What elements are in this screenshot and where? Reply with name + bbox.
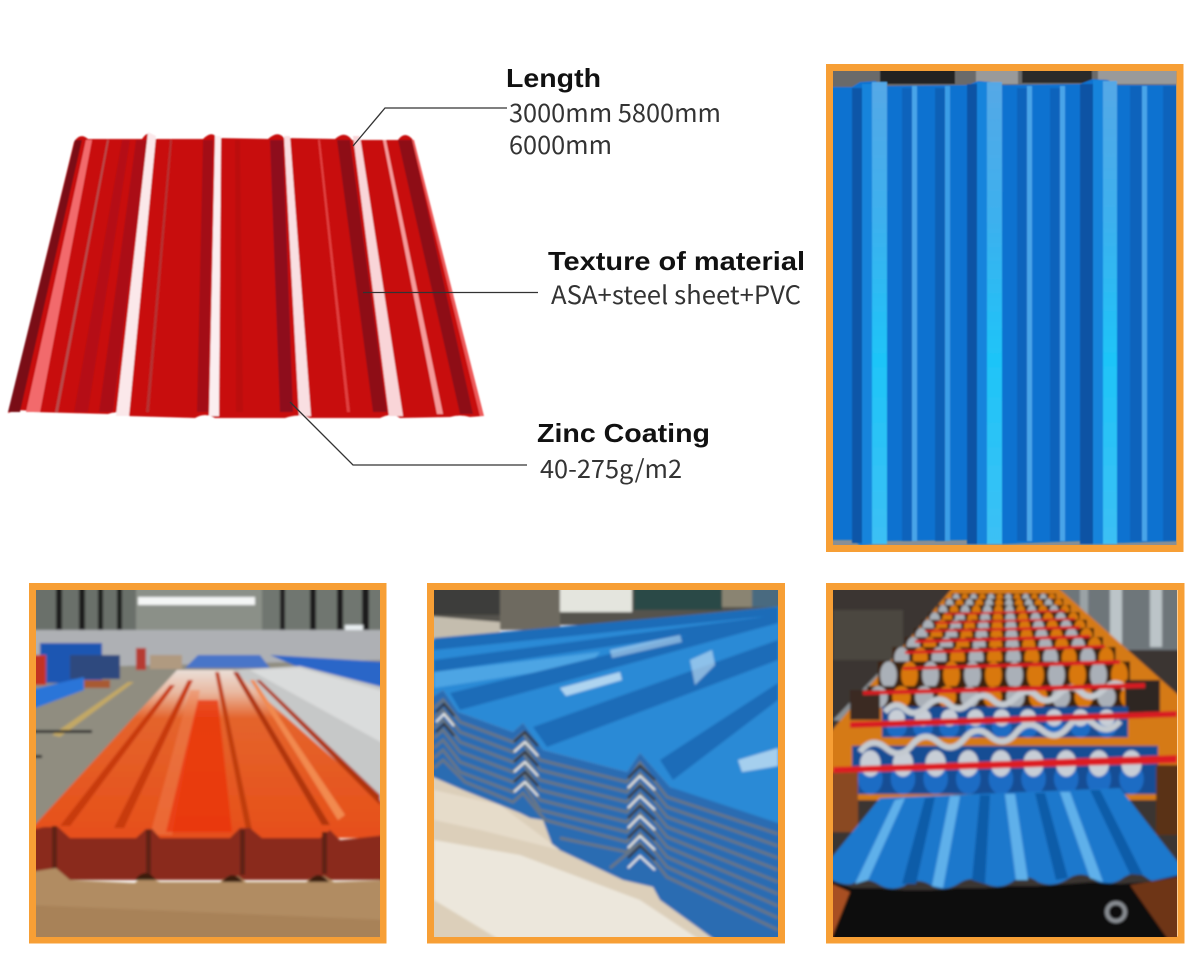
callout: zinc coating: 40-275g/m2 [540,450,682,486]
red roofing sheet product image [8,132,484,418]
callout: length [353,63,721,162]
panel: blue sheet close-up [830,68,1180,548]
callout: length: 3000mm 5800mm [509,94,721,130]
callout: length: Length [506,63,601,93]
callout: texture of material [363,246,805,312]
panel: roll forming machine photo [828,585,1184,942]
panel: red sheet in factory photo [30,585,386,942]
callout: texture of material: ASA+steel sheet+PVC [551,276,801,312]
callout: zinc coating [290,402,710,486]
panel: stacked blue sheets photo [428,585,784,945]
callout: length: 6000mm [509,126,612,162]
callout: texture of material: Texture of material [548,246,805,276]
callout: zinc coating: Zinc Coating [537,418,710,448]
